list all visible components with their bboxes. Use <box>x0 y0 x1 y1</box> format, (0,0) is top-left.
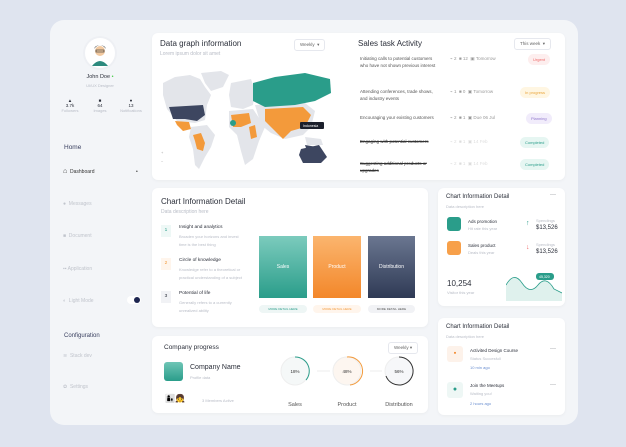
panel: sales task activity: Planning <box>531 116 547 121</box>
panel: sales task activity: Completed <box>525 140 544 145</box>
panel: chart information detail main: Data description here <box>161 209 209 215</box>
panel: sales task activity: Encouraging your existing customers <box>360 115 434 120</box>
south america <box>189 125 215 169</box>
panel: right activity <box>438 318 565 415</box>
stats: Followers <box>61 108 79 113</box>
progress rings <box>280 356 414 408</box>
panel: right activity: ● <box>453 386 457 393</box>
panel: sales task activity: Engaging with potential customers <box>360 139 429 144</box>
progress rings: 18% <box>290 369 300 374</box>
stats <box>61 98 142 113</box>
progress rings: Product <box>338 402 357 408</box>
list items: Broaden your horizons and invest <box>179 234 239 239</box>
panel: right chart information: Sales product <box>468 243 496 248</box>
panel: right chart information: Spendings <box>536 242 555 247</box>
panel: company progress: Profile data <box>190 375 210 380</box>
world map <box>161 71 331 169</box>
world map: + <box>161 150 164 155</box>
stats: ■ <box>99 98 101 103</box>
panel: right activity: Data description here <box>446 334 484 339</box>
sidebar: ≋ Stack dev <box>63 353 92 359</box>
panel: chart information detail main <box>152 188 428 327</box>
area chart <box>506 273 562 301</box>
stats: Images <box>93 108 107 113</box>
panel: chart information detail main: Product <box>328 264 346 270</box>
panel: company progress: 3 Members Active <box>202 398 234 403</box>
asia <box>255 103 315 139</box>
mexico <box>175 121 191 131</box>
africa <box>229 109 265 165</box>
asia orange <box>265 107 311 139</box>
list items: Generally refers to a currently <box>179 300 232 305</box>
panel: company progress: 👩‍👦‍👧 <box>165 394 185 403</box>
australia <box>299 145 327 163</box>
avatar <box>85 38 115 68</box>
list items: Insight and analytics <box>179 225 222 230</box>
panel: right chart information: Deals this year <box>468 250 494 255</box>
list items <box>161 224 242 313</box>
stats: 13 <box>128 103 134 108</box>
list items: 1 <box>165 228 167 233</box>
progress rings: 56% <box>394 369 404 374</box>
panel: data graph: Data graph information <box>160 39 241 48</box>
panel: right chart information: Chart Information Detail <box>446 194 509 200</box>
panel: right activity: ▪ <box>454 350 456 357</box>
list items: Potential of life <box>179 291 210 296</box>
bar cards: Sales <box>277 264 289 270</box>
panel: data graph: Lorem ipsum dolor sit amet <box>160 51 220 57</box>
panel: sales task activity: Sales task Activity <box>358 39 422 48</box>
panel: sales task activity: Attending conferences, trade shows, and industry events <box>360 89 433 101</box>
panel: right activity: ··· <box>550 346 556 352</box>
list items: time is the best thing <box>179 242 216 247</box>
progress rings: Distribution <box>385 402 413 408</box>
panel: company progress <box>152 336 428 413</box>
panel: right activity: Join the Meetups <box>470 383 504 388</box>
panel: chart information detail main: Chart Information Detail <box>161 197 245 206</box>
north america <box>163 75 211 123</box>
stats: 3.7k <box>66 103 74 108</box>
panel: sales task activity: Completed <box>525 162 544 167</box>
configuration: Configuration <box>64 333 100 339</box>
list items: Circle of knowledge <box>179 258 221 263</box>
progress rings: Sales <box>288 402 302 408</box>
south america orange <box>193 133 205 151</box>
panel: right activity: Waiting you! <box>470 391 492 396</box>
area chart: 45,320 <box>539 275 550 279</box>
europe <box>229 79 255 109</box>
usa <box>169 105 205 121</box>
panel: sales task activity <box>358 38 552 173</box>
panel: sales task activity: This week ▾ <box>520 41 545 46</box>
panel: right chart information: $13,526 <box>536 249 558 255</box>
panel: chart information detail main: MORE DETAIL HERE <box>377 307 406 311</box>
stats: ● <box>130 98 132 103</box>
panel: right chart information: 10,254 <box>447 279 471 288</box>
stats: ▲ <box>68 98 72 103</box>
tooltip <box>300 122 324 129</box>
panel: company progress: Company progress <box>164 344 219 351</box>
progress rings: 48% <box>342 369 352 374</box>
panel: sales task activity: ⌁ 2 ■ 12 ▣ Tomorrow <box>450 56 496 61</box>
nav items: ▪▪ Application <box>63 266 92 272</box>
world map: − <box>161 159 164 164</box>
bar cards <box>259 236 307 298</box>
list items: 2 <box>165 261 167 266</box>
panel: company progress: Weekly ▾ <box>394 345 412 350</box>
list items: 3 <box>165 294 167 299</box>
panel: right activity: Status Succesfull <box>470 356 501 361</box>
nav items <box>63 168 141 304</box>
panel: sales task activity: Initiating calls to potential customers who have not shown previous interest <box>360 56 435 68</box>
panel: sales task activity: ⌁ 1 ■ 0 ▣ Tomorrow <box>450 89 493 94</box>
panel: sales task activity: ⌁ 2 ■ 1 ▣ 14 Feb <box>450 139 487 144</box>
nav items: ● Messages <box>63 201 92 207</box>
sidebar: ✿ Settings <box>63 384 88 390</box>
sidebar: UI/UX Designer <box>86 83 114 88</box>
panel: right chart information: Spendings <box>536 218 555 223</box>
user name: John Doe • <box>86 74 114 80</box>
panel: data graph: Weekly ▾ <box>300 42 319 47</box>
nav items: ◐ Light Mode <box>63 298 94 304</box>
stats: Notifications <box>120 108 142 113</box>
panel: right chart information: Hit rate this year <box>468 226 497 231</box>
panel: sales task activity: Urgent <box>533 57 545 62</box>
panel: right activity: 2 hours ago <box>470 401 491 406</box>
list items: Knowledge refer to a theoretical or <box>179 267 240 272</box>
panel: sales task activity: Suggesting additional products or upgrades <box>360 161 427 173</box>
panel: right activity: Chart Information Detail <box>446 324 509 330</box>
west africa <box>231 113 251 127</box>
panel: right chart information: ··· <box>550 192 556 198</box>
list items: unrealized ability <box>179 308 209 313</box>
nav items: ⌂ Dashboard <box>63 168 94 175</box>
panel: company progress: Company Name <box>190 364 241 371</box>
greenland <box>201 71 229 91</box>
sidebar <box>61 38 142 390</box>
panel: sales task activity: In progress <box>525 90 545 95</box>
panel: right chart information: Ads promotion <box>468 219 497 224</box>
panel: right activity: 10 min ago <box>470 365 490 370</box>
panel: chart information detail main: MORE DETAIL HERE <box>322 307 352 311</box>
panel: sales task activity: ⌁ 2 ■ 1 ▣ 14 Feb <box>450 161 487 166</box>
panel: right chart information: ↓ <box>526 244 530 251</box>
panel: right activity: Activited Design Course <box>470 348 518 353</box>
nav items: ■ Document <box>63 233 92 239</box>
list items: practical understanding of a subject <box>179 275 242 280</box>
world map: Indonesia <box>303 124 318 128</box>
panel: data graph <box>160 39 325 57</box>
stats: 64 <box>97 103 102 108</box>
nav items: • <box>136 169 138 175</box>
panel: right chart information: $13,526 <box>536 225 558 231</box>
panel: right chart information: ↑ <box>526 220 530 227</box>
nav home: Home <box>64 144 81 151</box>
panel: chart information detail main: MORE DETAIL HERE <box>268 307 298 311</box>
panel: right chart information: Data description here <box>446 204 484 209</box>
top card <box>152 33 565 180</box>
russia <box>253 73 331 107</box>
panel: right activity: ··· <box>550 382 556 388</box>
panel: sales task activity: ⌁ 2 ■ 1 ▣ Due 06 Jul <box>450 115 495 120</box>
main container <box>50 20 578 425</box>
panel: chart information detail main: Distribution <box>379 264 404 270</box>
panel: right chart information <box>438 188 565 306</box>
panel: right chart information: Visitor this year <box>447 290 474 295</box>
